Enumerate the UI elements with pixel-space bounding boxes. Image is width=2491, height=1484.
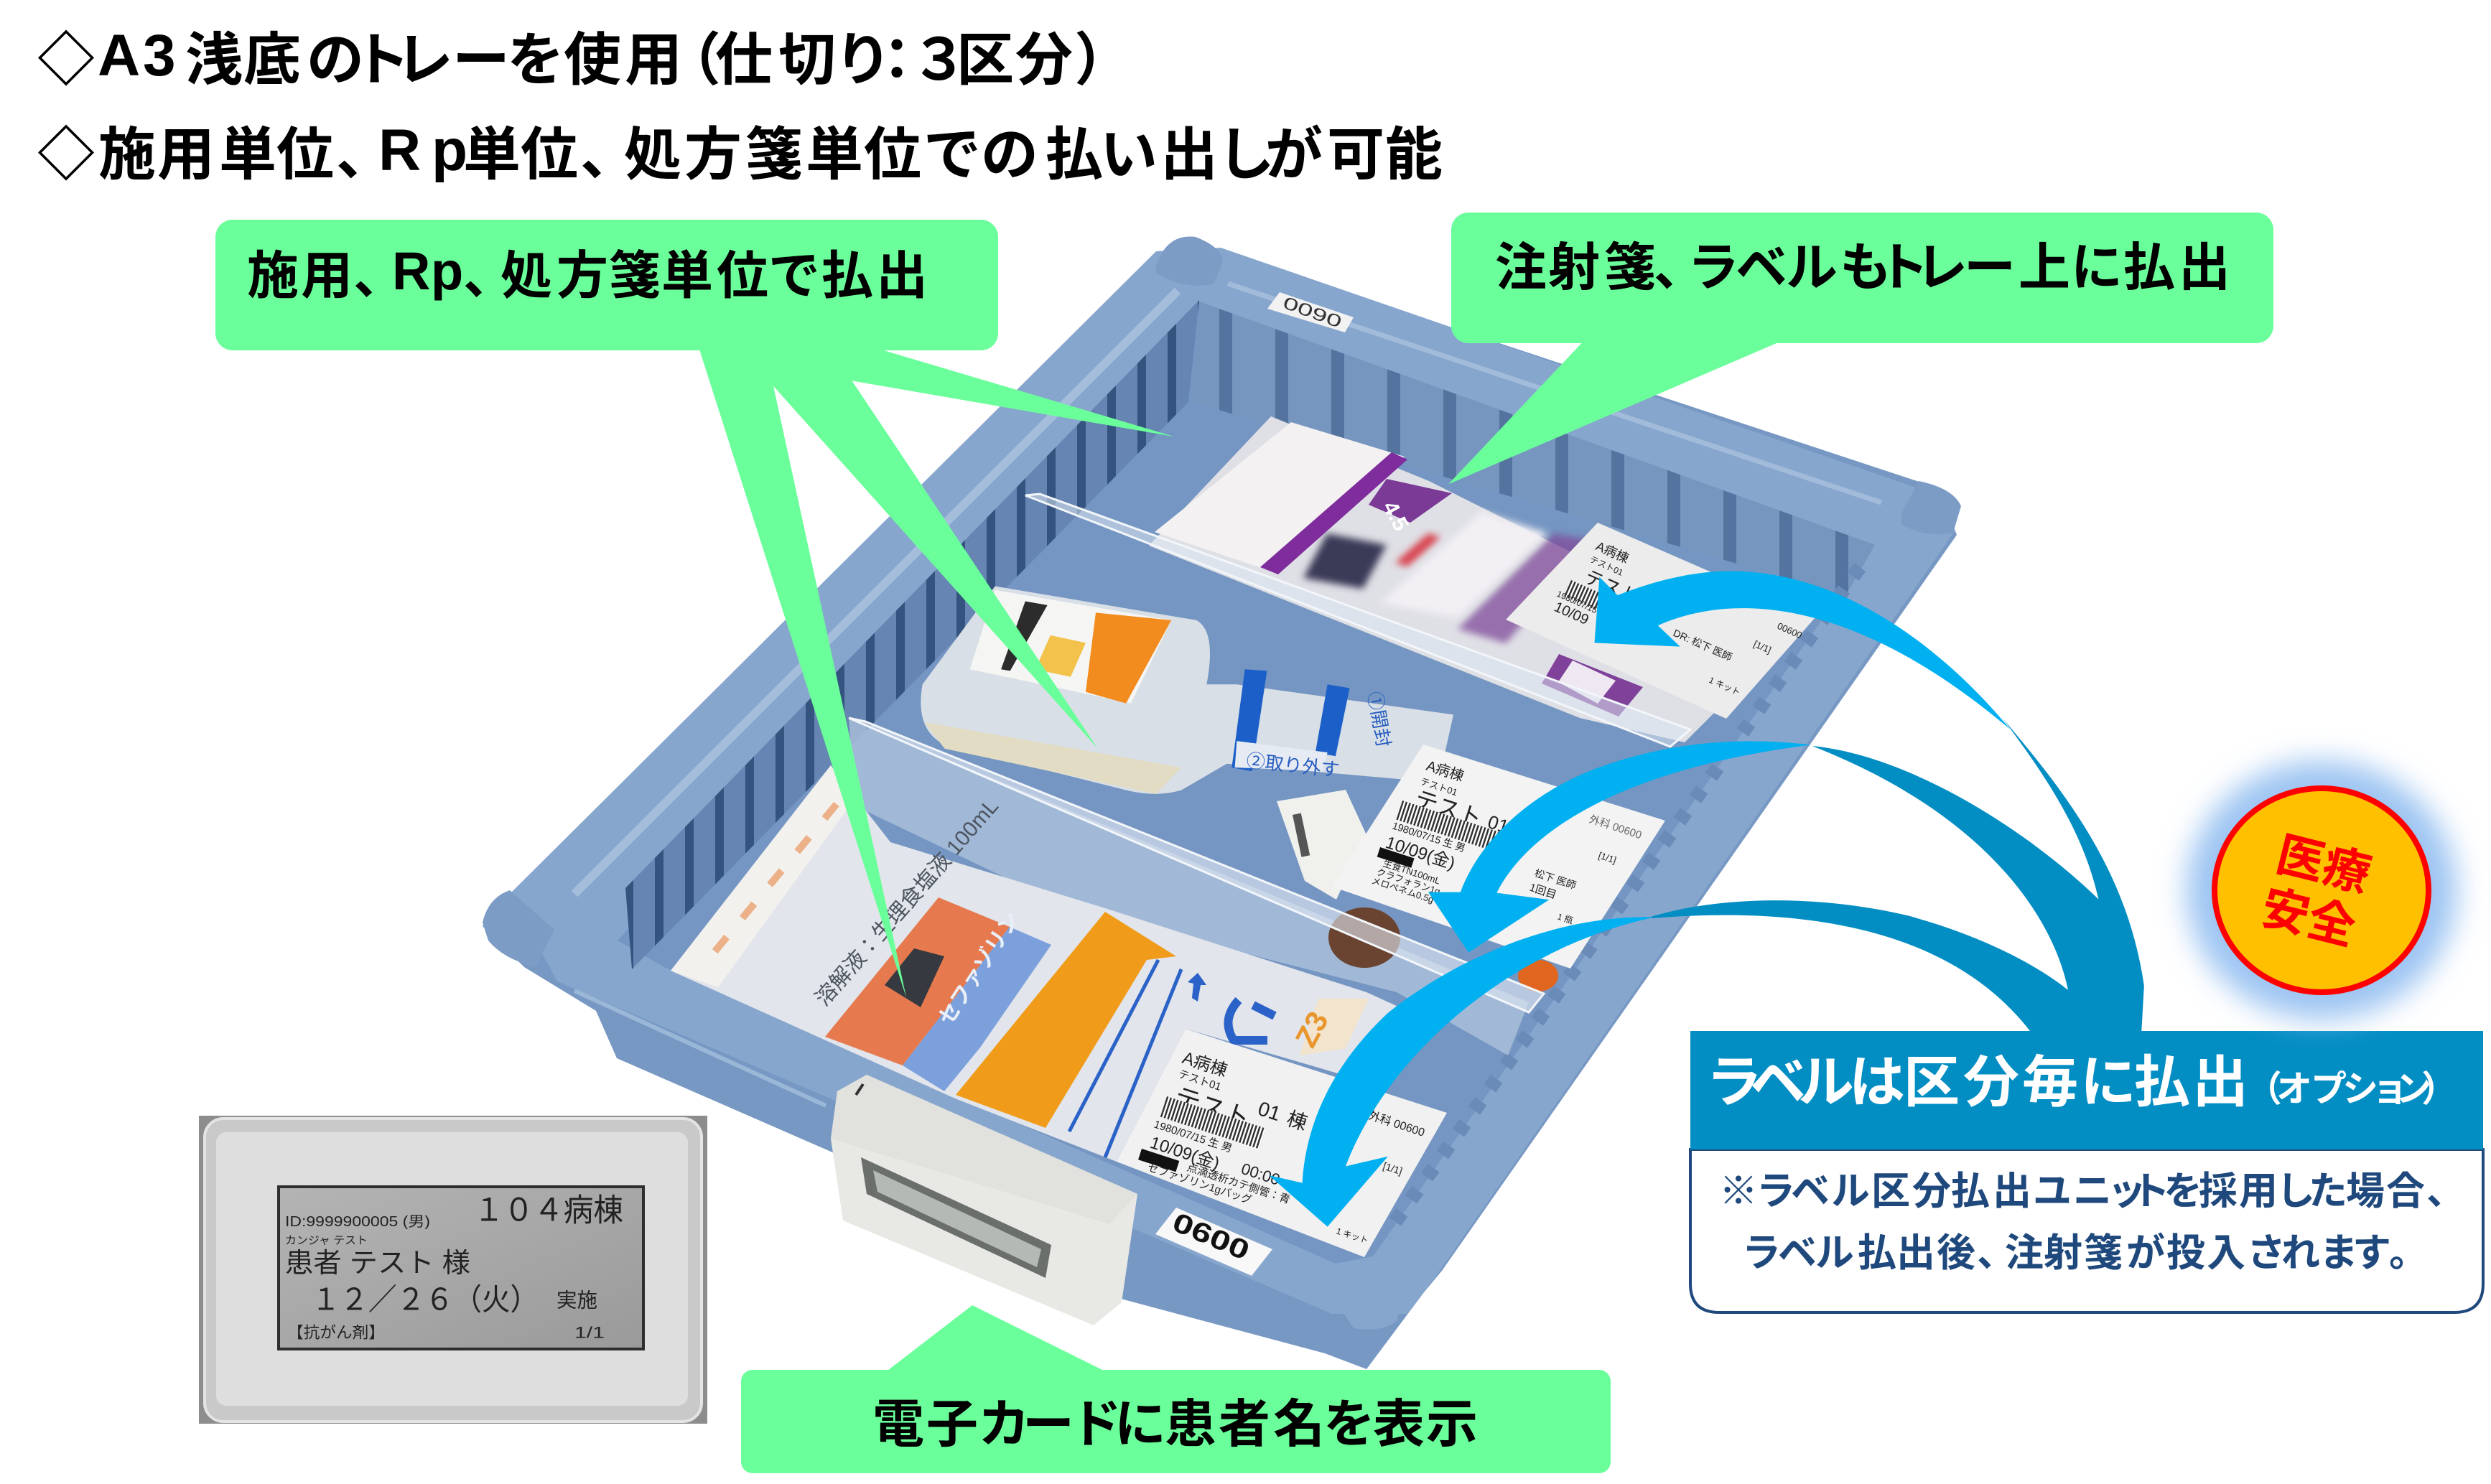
top label text: テスト01 bbox=[1588, 554, 1625, 578]
arrow 2 to middle compartment bbox=[1428, 741, 1811, 953]
arrow 3 to bottom compartment bbox=[1269, 917, 1655, 1227]
top label text: テスト bbox=[1582, 566, 1642, 608]
middle label text: テスト01 bbox=[1419, 776, 1459, 798]
top label text: 00600 bbox=[1776, 620, 1804, 640]
screen date: １２／２６（火） bbox=[312, 1282, 539, 1317]
arrow 1 to top compartment bbox=[1594, 571, 2011, 729]
top bag bbox=[1149, 416, 1723, 742]
tray rim bbox=[510, 248, 1955, 1314]
tray photo bbox=[483, 237, 1961, 1369]
card frame background bbox=[199, 1116, 707, 1424]
badge glow bbox=[2187, 761, 2457, 1019]
top bag print bbox=[1303, 512, 1595, 643]
heading: line 2: Rp bbox=[378, 118, 467, 182]
vial bbox=[1277, 790, 1366, 900]
bottom label text bbox=[1138, 1048, 1426, 1246]
arrow 2 tail bbox=[1812, 746, 2107, 1033]
divider upper bbox=[1025, 494, 1690, 747]
bottle body bbox=[921, 587, 1453, 794]
callout: injection slip bbox=[1448, 213, 2273, 484]
corner tab top bbox=[1156, 237, 1223, 286]
bottle seal text: ①開封 bbox=[1364, 690, 1395, 749]
bottle neck blue strip 2 bbox=[1316, 684, 1350, 756]
top label text: [1/1] bbox=[1752, 638, 1773, 655]
card holder bbox=[831, 1075, 1137, 1325]
bottle bbox=[921, 587, 1453, 794]
middle label text: A病棟 bbox=[1424, 757, 1466, 785]
callout spike bbox=[1448, 337, 1791, 484]
electronic card photo bbox=[199, 1116, 707, 1424]
card screen bbox=[279, 1187, 643, 1349]
bottom bag drug name: セファゾリン bbox=[934, 908, 1025, 1030]
callout text: 電子カードに患者名を表示 bbox=[872, 1381, 1478, 1457]
header option text: （オプション） bbox=[2246, 1060, 2457, 1112]
callout text: Rp bbox=[392, 241, 463, 300]
print purple column bbox=[1458, 533, 1595, 643]
top bag white pack bbox=[1155, 422, 1405, 572]
callout: electronic card bbox=[741, 1305, 1611, 1473]
bottle orange label bbox=[1086, 612, 1171, 704]
top label text bbox=[1552, 538, 1804, 697]
callout spikes bbox=[698, 345, 1174, 998]
bag solvent text: 溶解液：生理食塩液 100mL bbox=[811, 795, 1003, 1011]
far wall slats bbox=[1192, 302, 1875, 596]
corner tab left bbox=[483, 890, 554, 967]
callout text: 注射箋、ラベルもトレー上に払出 bbox=[1495, 225, 2230, 300]
vial barcode bbox=[1293, 813, 1310, 857]
bottom label text: 10/09(金) bbox=[1147, 1133, 1222, 1174]
heading: line 1: ◇ bbox=[37, 14, 95, 97]
top label text: 1980/07/15 bbox=[1555, 589, 1599, 615]
bottom label text: [1/1] bbox=[1382, 1160, 1404, 1177]
middle label text: 01 bbox=[1485, 811, 1512, 838]
divider lower film bbox=[849, 718, 1529, 1055]
bottle yellow mark bbox=[1035, 635, 1086, 677]
top bag dose text: 4.5 bbox=[1378, 498, 1413, 535]
badge circle bbox=[2215, 788, 2429, 992]
panel body bbox=[1690, 1149, 2483, 1312]
bottom label bbox=[1117, 1029, 1447, 1257]
card screen bbox=[873, 1170, 1041, 1267]
middle label text: 1 瓶 bbox=[1556, 912, 1574, 926]
middle label text bbox=[1370, 757, 1643, 926]
top bag lower tag centre bbox=[1558, 661, 1616, 704]
tray lower body bbox=[483, 251, 1957, 1369]
bottom label text: セファゾリン1gバッグ bbox=[1146, 1162, 1253, 1207]
bottom bag blue rule 2 bbox=[1105, 969, 1181, 1157]
bottom label text: テスト bbox=[1171, 1082, 1254, 1134]
orange knob bbox=[1518, 960, 1558, 991]
number plate 0600 bbox=[1155, 1208, 1272, 1276]
card white face bbox=[216, 1132, 688, 1406]
screen ward: １０４病棟 bbox=[474, 1193, 623, 1228]
bottom bag dark window bbox=[885, 948, 944, 1007]
heading: line 1: A3 bbox=[98, 23, 176, 88]
bag strip print bbox=[700, 804, 837, 969]
bottom label text: テスト01 bbox=[1177, 1068, 1223, 1093]
bottom bag blue rule 1 bbox=[1069, 960, 1158, 1131]
top label text: DR: 松下 医師 bbox=[1672, 627, 1734, 663]
bottle neck blue strip 1 bbox=[1231, 669, 1267, 771]
rim highlight far bbox=[1228, 284, 1881, 503]
arrows: bright sections over tray bbox=[1269, 571, 2011, 1227]
middle label text: 10/09(金) bbox=[1383, 833, 1458, 874]
heading: line 1: 浅底のトレーを使用（仕切り：３区分） bbox=[185, 14, 1132, 97]
bottom bag bbox=[671, 765, 1407, 1162]
left wall slats bbox=[625, 300, 1199, 969]
card holder top plate bbox=[831, 1075, 1137, 1224]
callout text: 施用、 bbox=[247, 233, 405, 309]
bottom label text: 00:00 bbox=[1239, 1159, 1282, 1189]
number plate 0090 bbox=[1267, 292, 1354, 332]
print white panel bbox=[1381, 512, 1547, 617]
middle label text: 1回目 bbox=[1528, 882, 1558, 902]
arrow 1 tail bbox=[2002, 718, 2144, 1033]
arrow 3 tail bbox=[1652, 900, 2080, 1033]
note line 2: ラベル払出後、注射箋が投入されます。 bbox=[1742, 1221, 2428, 1278]
bottom bag edge strip bbox=[671, 765, 851, 987]
divider lower bbox=[849, 718, 1544, 1012]
callout box bbox=[215, 220, 998, 350]
middle label text: メロペネム0.5g bbox=[1370, 875, 1435, 905]
bottom label text: 点滴透析カテ側管：青 bbox=[1186, 1161, 1292, 1206]
middle label text: 1980/07/15 生 男 bbox=[1391, 820, 1467, 854]
callout box bbox=[1451, 213, 2273, 343]
number plate 0090 text: 0090 bbox=[1280, 293, 1344, 332]
vial cap bbox=[1328, 907, 1400, 968]
bottom bag orange main bbox=[956, 912, 1176, 1128]
note line 1: ※ラベル区分払出ユニットを採用した場合、 bbox=[1719, 1159, 2465, 1216]
callout spike bbox=[885, 1305, 1108, 1373]
middle label text: 生食TN100mL bbox=[1382, 858, 1442, 887]
corner tab right bbox=[1901, 481, 1961, 534]
middle label text: 外科 00600 bbox=[1588, 813, 1643, 841]
bottle sticker text: ②取り外す bbox=[1245, 750, 1341, 781]
bottom bag orange panel bbox=[825, 897, 1010, 1065]
number plate 0600 text: 0600 bbox=[1168, 1208, 1254, 1266]
panel: label dispensing bbox=[1690, 1031, 2483, 1312]
bottom label text: 1 キット bbox=[1335, 1226, 1369, 1246]
tray floor bbox=[618, 302, 1875, 1264]
header text: ラベルは区分毎に払出 bbox=[1706, 1037, 2248, 1118]
small vial pack text: Z3 bbox=[1288, 1006, 1335, 1053]
screen page: 1/1 bbox=[574, 1324, 605, 1341]
top bag purple band bbox=[1260, 452, 1407, 574]
bottle lower sticker bbox=[1235, 741, 1328, 771]
screen name: 患者 テスト 様 bbox=[285, 1249, 470, 1279]
bottom label text: 外科 00600 bbox=[1367, 1109, 1426, 1139]
bottom bag blue arrow bbox=[1188, 973, 1206, 1002]
corner tab bottom bbox=[1332, 1269, 1405, 1330]
middle label text: テスト bbox=[1412, 785, 1485, 831]
bottom label text: 01 bbox=[1255, 1097, 1283, 1125]
screen kana: カンジャ テスト bbox=[285, 1235, 368, 1246]
top bag purple dose tag bbox=[1369, 479, 1452, 523]
bottle liquid bbox=[924, 722, 1181, 794]
arrows: dark sections joining header bbox=[1652, 718, 2144, 1033]
card holder slot bbox=[856, 1084, 863, 1095]
heading: line 2: 単位、処方箋単位での払い出しが可能 bbox=[463, 108, 1443, 192]
bottom bag blue mark bbox=[1228, 1000, 1275, 1040]
print dark window bbox=[1303, 533, 1387, 589]
callout text: 、処方箋単位で払出 bbox=[463, 233, 928, 309]
middle label text: クラフォラン1g bbox=[1375, 867, 1442, 897]
badge: medical safety bbox=[2187, 761, 2457, 1019]
screen category: 【抗がん剤】 bbox=[287, 1324, 385, 1341]
right wall teeth bbox=[1386, 567, 1860, 1235]
screen id: ID:9999900005 (男) bbox=[285, 1214, 430, 1230]
callout box bbox=[741, 1370, 1611, 1473]
heading: line 2: ◇施用単位、 bbox=[37, 108, 394, 192]
print red tag bbox=[1395, 533, 1440, 566]
bottom bag blue panel bbox=[903, 927, 1051, 1091]
bottle black strip bbox=[1001, 602, 1048, 671]
callout: treatment units bbox=[215, 220, 1174, 998]
card clear case bbox=[205, 1119, 702, 1422]
top bag lower tag bbox=[1542, 654, 1643, 717]
top label text: 1 キット bbox=[1708, 675, 1742, 697]
rim highlight front bbox=[574, 991, 826, 1106]
top label text: A病棟 bbox=[1593, 538, 1631, 566]
middle label text: [1/1] bbox=[1597, 850, 1618, 866]
bottle label bbox=[970, 590, 1171, 704]
middle label text: 松下 医師 bbox=[1533, 867, 1578, 891]
badge text upper: 医療 bbox=[2271, 827, 2376, 902]
top label bbox=[1506, 523, 1815, 719]
top label text: 10/09 bbox=[1552, 599, 1591, 628]
card screen frame bbox=[861, 1157, 1051, 1278]
badge text lower: 安全 bbox=[2256, 880, 2361, 955]
rim highlight left bbox=[574, 291, 1178, 894]
bottom label text: 棟 bbox=[1284, 1107, 1310, 1134]
bottom label text: A病棟 bbox=[1180, 1048, 1229, 1081]
small vial pack bbox=[1300, 999, 1369, 1055]
middle label bbox=[1332, 745, 1665, 969]
screen status: 実施 bbox=[557, 1289, 597, 1311]
bottom label text: 1980/07/15 生 男 bbox=[1153, 1119, 1234, 1155]
panel header bbox=[1690, 1031, 2483, 1149]
